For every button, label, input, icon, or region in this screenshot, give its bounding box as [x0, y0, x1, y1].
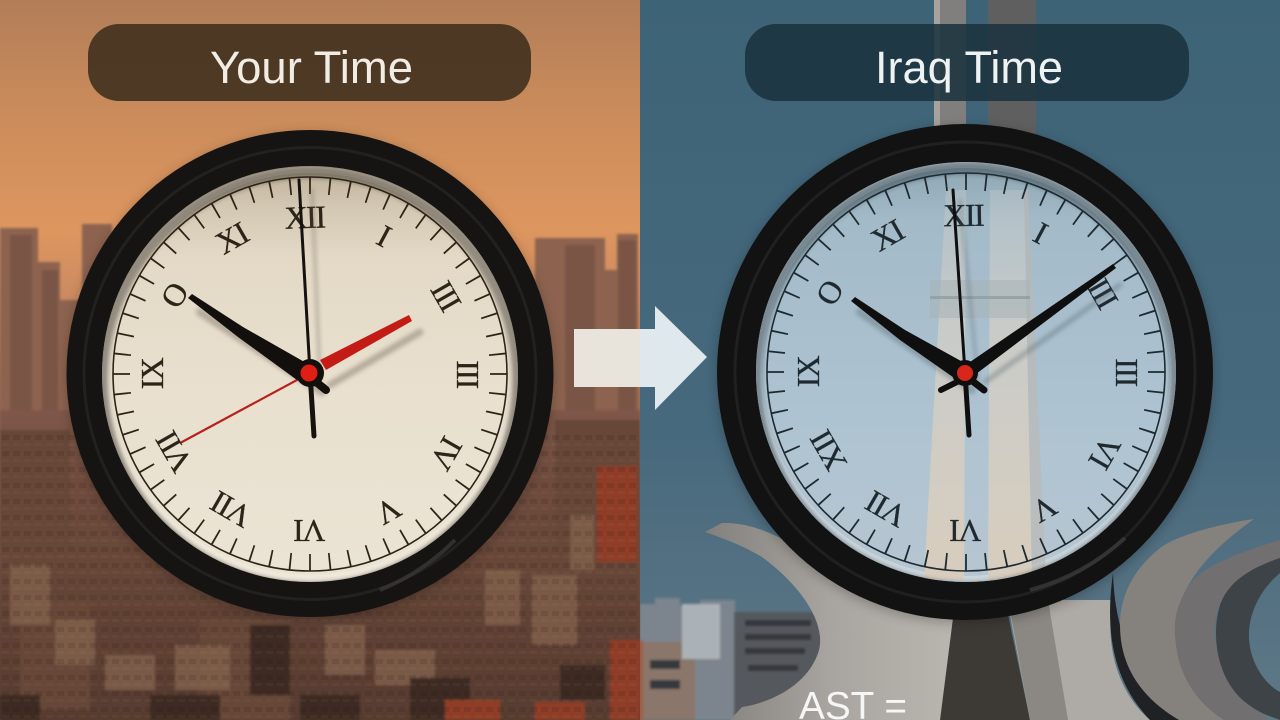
heading pill: your time: Your Time	[210, 42, 413, 93]
roman numerals: III	[1080, 272, 1126, 315]
towers seen through the face	[756, 168, 1176, 588]
roman numerals: XII	[943, 197, 984, 233]
roman numerals	[134, 198, 486, 549]
minute tick ring	[113, 177, 507, 571]
roman numerals	[790, 197, 1145, 549]
roman numerals: I	[1028, 214, 1053, 251]
skyline buildings	[0, 224, 640, 720]
roman numerals: O	[808, 274, 850, 311]
clock face	[756, 162, 1176, 582]
panel: your time background with city at dusk	[0, 0, 640, 720]
roman numerals: V	[369, 490, 407, 533]
roman numerals: O	[153, 277, 195, 314]
roman numerals: IV	[423, 431, 470, 477]
roman numerals: XI	[865, 211, 910, 258]
roman numerals: XI	[209, 214, 255, 261]
background city	[640, 598, 824, 720]
clock bezel	[717, 124, 1213, 623]
roman numerals: III	[1109, 358, 1145, 387]
clock: your time	[66, 130, 554, 619]
minute tick ring	[767, 173, 1165, 571]
heading pill: iraq time	[745, 24, 1189, 101]
tower shafts	[934, 0, 1036, 140]
arrow between clocks	[574, 306, 707, 410]
roman numerals: VII	[859, 484, 913, 535]
clock face	[102, 166, 518, 588]
heading pill: iraq time: Iraq Time	[875, 42, 1063, 93]
heading pill: your time	[88, 24, 531, 101]
roman numerals: VI	[1082, 430, 1129, 476]
monument crescents	[705, 519, 1280, 720]
roman numerals: I	[371, 217, 397, 254]
panel: iraq time background with towers and monument	[640, 0, 1280, 720]
roman numerals: IX	[134, 357, 170, 389]
roman numerals: XII	[284, 198, 326, 236]
roman numerals: III	[424, 275, 469, 317]
roman numerals: V	[1025, 488, 1063, 531]
roman numerals: IX	[790, 355, 826, 387]
clock hands	[851, 190, 1120, 435]
roman numerals: VI	[950, 513, 981, 549]
roman numerals: XII	[802, 424, 854, 478]
roman numerals: III	[450, 360, 486, 389]
clock bezel	[66, 130, 554, 619]
clock: iraq time	[717, 124, 1213, 623]
roman numerals: VII	[204, 484, 258, 536]
central dark spire	[940, 610, 1030, 720]
clock hands	[182, 180, 420, 442]
roman numerals: VII	[148, 425, 200, 479]
roman numerals: VI	[294, 513, 325, 549]
